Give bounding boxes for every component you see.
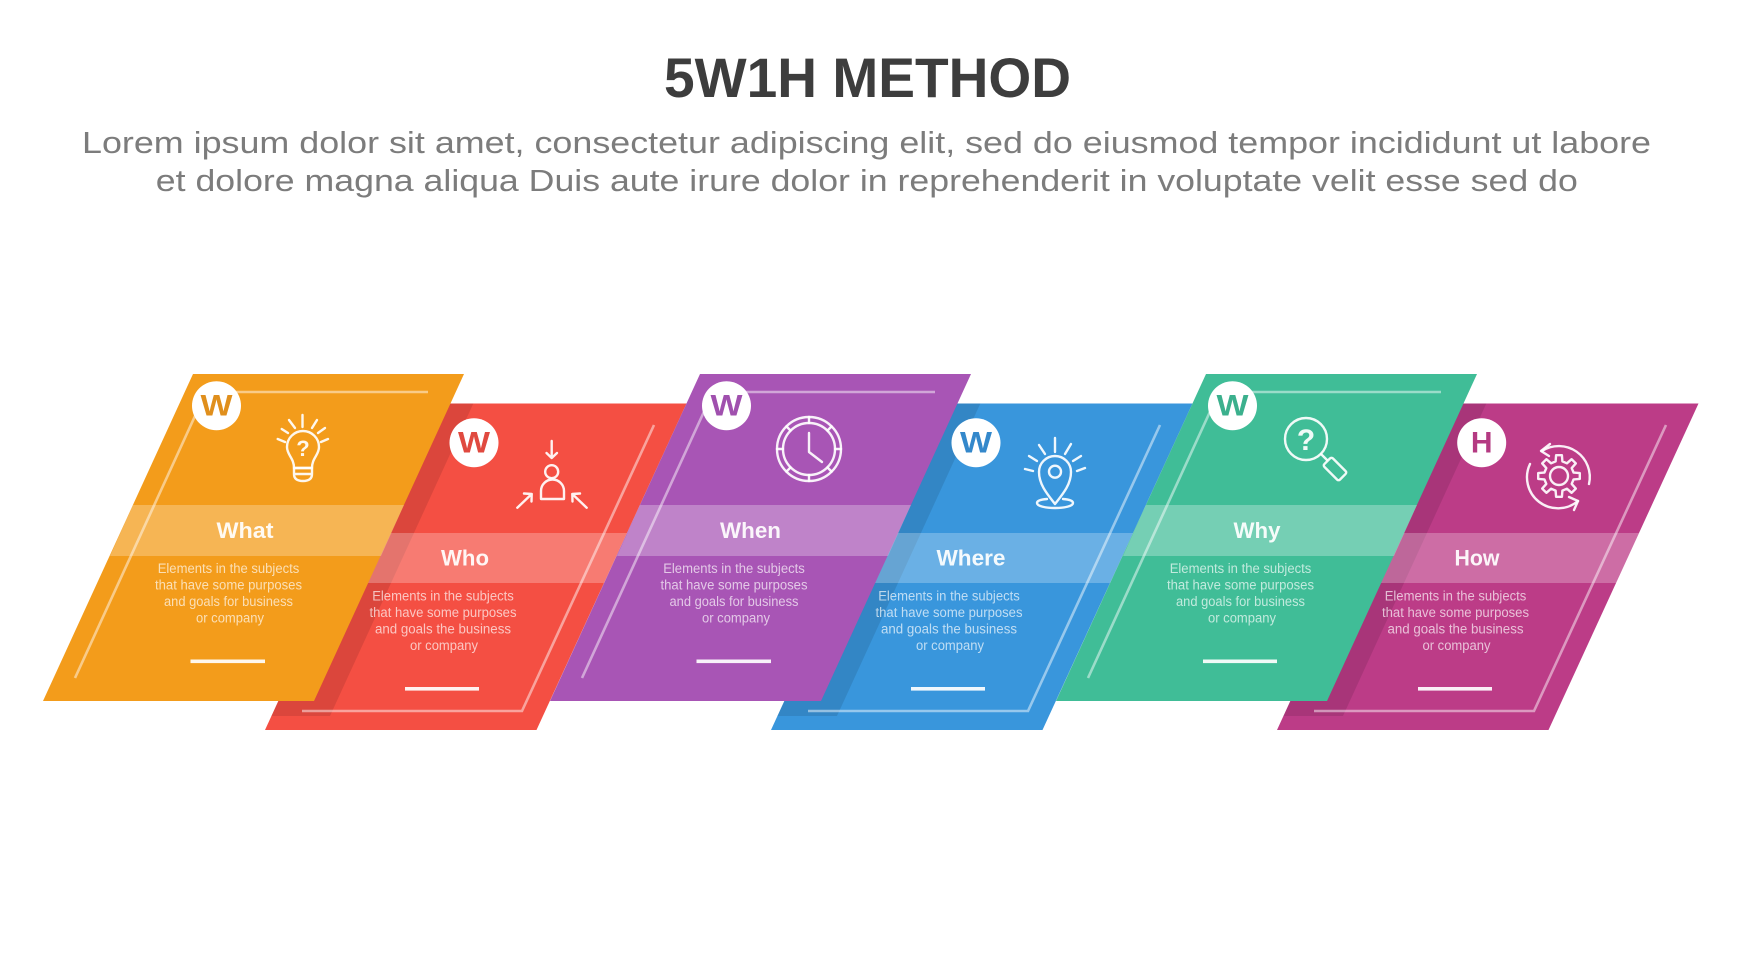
- text: when description: [660, 561, 808, 626]
- text: why description: and goals for business: [1176, 594, 1305, 609]
- icon: what badge: [192, 381, 241, 430]
- text: what description: that have some purposes: [155, 578, 302, 592]
- label: what: What: [216, 518, 274, 543]
- text: how description: that have some purposes: [1382, 605, 1529, 620]
- text: why description: or company: [1208, 610, 1276, 626]
- icon: gear with cycle arrows: [1527, 444, 1590, 510]
- icon: who badge: [450, 418, 498, 467]
- text: where description: and goals the business: [881, 622, 1017, 636]
- subtitle text block: [82, 125, 1651, 198]
- text: where description: [876, 588, 1023, 653]
- icon: location pin: [1025, 438, 1085, 508]
- panel: how: [1277, 404, 1698, 730]
- icon: when badge: W: [710, 390, 743, 422]
- icon: how badge: H: [1471, 426, 1493, 460]
- text: how description: Elements in the subjects: [1385, 588, 1527, 604]
- text: when description: and goals for business: [670, 594, 799, 609]
- text: who description: Elements in the subjects: [372, 588, 514, 604]
- icon: light bulb with question mark: ?: [296, 436, 310, 461]
- icon: who badge: W: [458, 426, 491, 460]
- text: when description: Elements in the subjects: [663, 561, 805, 576]
- icon: why badge: [1208, 381, 1257, 430]
- text: what description: and goals for business: [164, 594, 293, 609]
- text: why description: that have some purposes: [1167, 578, 1314, 592]
- icon: clock: [777, 417, 841, 481]
- text: how description: and goals the business: [1388, 622, 1524, 636]
- text: who description: [370, 588, 517, 653]
- subtitle text block: et dolore magna aliqua Duis aute irure dolor in reprehenderit in voluptate velit esse sed do: [156, 163, 1578, 198]
- label: how: How: [1454, 546, 1500, 570]
- label: when: When: [720, 518, 781, 543]
- text: where description: Elements in the subjects: [878, 588, 1020, 604]
- text: how description: [1382, 588, 1529, 653]
- text: who description: that have some purposes: [370, 605, 517, 620]
- label: who: Who: [441, 546, 489, 570]
- icon: what badge: W: [200, 390, 233, 422]
- icon: magnifier with question mark: ?: [1297, 424, 1315, 457]
- icon: how badge: [1457, 418, 1506, 467]
- icon: where badge: W: [960, 426, 993, 460]
- text: when description: or company: [702, 610, 770, 626]
- text: what description: or company: [196, 610, 264, 626]
- text: who description: or company: [410, 638, 478, 653]
- icon: person with arrows: [517, 441, 587, 508]
- icon: when badge: [702, 381, 751, 430]
- icon: where badge: [952, 418, 1000, 467]
- text: when description: that have some purposes: [660, 578, 808, 592]
- panel: why: [1056, 374, 1477, 701]
- text: what description: Elements in the subjects: [158, 561, 300, 576]
- panel: when: [550, 374, 971, 701]
- label: why: Why: [1234, 518, 1281, 543]
- panel: who: [265, 404, 686, 730]
- text: where description: that have some purposes: [876, 605, 1023, 620]
- subtitle text block: Lorem ipsum dolor sit amet, consectetur adipiscing elit, sed do eiusmod tempor incididunt ut labore: [82, 125, 1651, 160]
- text: who description: and goals the business: [375, 622, 511, 636]
- icon: magnifier with question mark: [1285, 418, 1347, 481]
- panel: what: [43, 374, 464, 701]
- text: why description: Elements in the subjects: [1170, 561, 1312, 576]
- icon: light bulb with question mark: [278, 415, 328, 481]
- panel: where: [771, 404, 1192, 730]
- text: where description: or company: [916, 638, 984, 653]
- text: what description: [155, 561, 302, 626]
- text: why description: [1167, 561, 1314, 626]
- text: how description: or company: [1422, 638, 1491, 653]
- title: 5W1H METHOD: [664, 46, 1071, 109]
- label: where: Where: [936, 546, 1006, 570]
- icon: why badge: W: [1216, 390, 1249, 422]
